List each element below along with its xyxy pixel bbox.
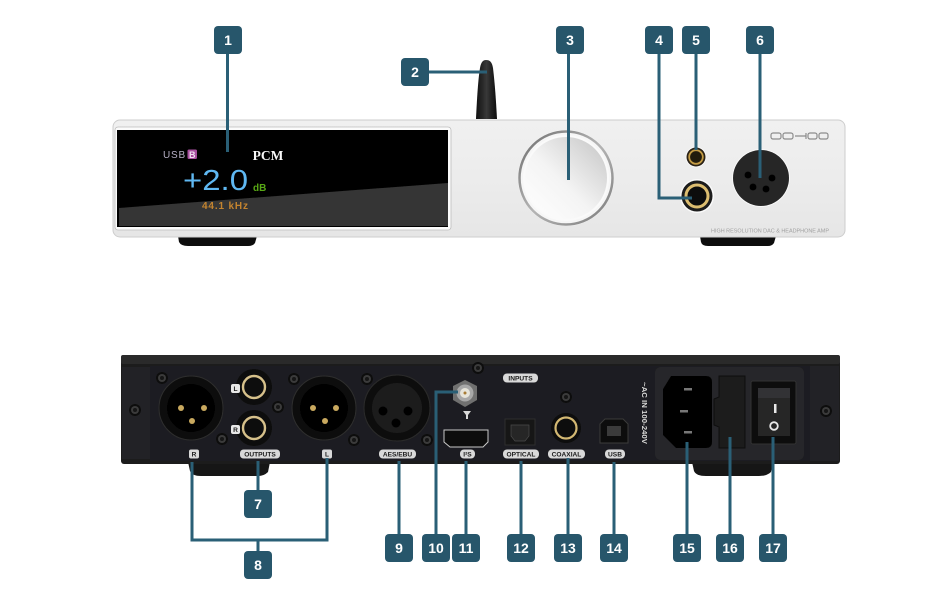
sample rate: 44.1 kHz bbox=[202, 201, 248, 212]
badge 9 bbox=[385, 534, 413, 562]
badge 9: 9 bbox=[395, 540, 403, 556]
badge 15 bbox=[673, 534, 701, 562]
badge 17: 17 bbox=[765, 540, 781, 556]
RCA outputs bbox=[236, 369, 272, 446]
badge 15: 15 bbox=[679, 540, 695, 556]
badge 8: 8 bbox=[254, 557, 262, 573]
rear labels: COAXIAL bbox=[552, 452, 581, 458]
antenna bbox=[476, 60, 497, 119]
badge 1: 1 bbox=[224, 32, 232, 48]
rear labels: USB bbox=[608, 452, 622, 458]
badge 13 bbox=[554, 534, 582, 562]
badge 17 bbox=[759, 534, 787, 562]
badge 6: 6 bbox=[756, 32, 764, 48]
badge 3: 3 bbox=[566, 32, 574, 48]
callout badges bbox=[214, 26, 787, 579]
rear panel device bbox=[121, 355, 840, 476]
rear labels: OPTICAL bbox=[507, 452, 535, 458]
badge 13: 13 bbox=[560, 540, 576, 556]
format label: PCM bbox=[253, 148, 284, 163]
badge 4: 4 bbox=[655, 32, 663, 48]
badge 12: 12 bbox=[513, 540, 529, 556]
badge 7: 7 bbox=[254, 496, 262, 512]
left balanced output bbox=[292, 376, 356, 440]
badge 16 bbox=[716, 534, 744, 562]
badge 5: 5 bbox=[692, 32, 700, 48]
AC input text: ~AC IN 100-240V bbox=[640, 382, 649, 444]
IEC power socket bbox=[663, 376, 712, 448]
badge 10 bbox=[422, 534, 450, 562]
volume knob bbox=[518, 130, 614, 226]
volume readout: +2.0 bbox=[183, 165, 248, 197]
badge 3 bbox=[556, 26, 584, 54]
badge 1 bbox=[214, 26, 242, 54]
rear labels: AES/EBU bbox=[383, 452, 412, 458]
badge 11 bbox=[452, 534, 480, 562]
rear labels: I²S bbox=[463, 452, 472, 458]
rear labels: INPUTS bbox=[508, 376, 533, 382]
rear labels: L bbox=[325, 452, 329, 458]
rear labels bbox=[189, 374, 625, 458]
badge 5 bbox=[682, 26, 710, 54]
input label bbox=[163, 150, 197, 161]
badge 4 bbox=[645, 26, 673, 54]
badge 10: 10 bbox=[428, 540, 444, 556]
badge 2: 2 bbox=[411, 64, 419, 80]
badge 16: 16 bbox=[722, 540, 738, 556]
product caption: HIGH RESOLUTION DAC & HEADPHONE AMP bbox=[711, 228, 830, 234]
small headphone jack bbox=[686, 146, 706, 168]
badge 14 bbox=[600, 534, 628, 562]
antenna connector bbox=[453, 380, 477, 407]
side brackets bbox=[122, 366, 839, 461]
balanced XLR headphone socket bbox=[732, 149, 790, 207]
input label: B bbox=[189, 150, 196, 160]
screen glare bbox=[119, 183, 448, 226]
right balanced output bbox=[159, 376, 223, 440]
rear labels: OUTPUTS bbox=[244, 452, 276, 458]
RCA channel tags: L bbox=[233, 386, 238, 393]
screws bbox=[129, 362, 832, 446]
AES/EBU socket bbox=[364, 375, 430, 441]
power rocker switch bbox=[751, 381, 796, 444]
silver chassis bbox=[113, 120, 845, 237]
coaxial socket bbox=[551, 413, 581, 443]
RCA channel tags bbox=[231, 384, 240, 434]
badge 7 bbox=[244, 490, 272, 518]
black chassis bbox=[121, 355, 840, 464]
callout leader lines bbox=[192, 54, 773, 551]
dB unit: dB bbox=[253, 183, 266, 194]
brand logo bbox=[771, 133, 828, 139]
badge 8 bbox=[244, 551, 272, 579]
optical socket bbox=[505, 419, 535, 445]
HDMI socket bbox=[444, 430, 488, 447]
rubber feet bbox=[178, 236, 776, 246]
badge 11: 11 bbox=[459, 540, 474, 556]
front panel device bbox=[113, 60, 845, 246]
large headphone jack bbox=[680, 179, 714, 213]
RCA channel tags: R bbox=[233, 427, 238, 434]
input label: USB bbox=[163, 150, 186, 161]
fuse holder bbox=[714, 376, 745, 448]
antenna symbol bbox=[463, 411, 471, 419]
display screen bbox=[115, 127, 451, 230]
power module plate bbox=[655, 367, 804, 460]
rear rubber feet bbox=[188, 462, 773, 476]
badge 12 bbox=[507, 534, 535, 562]
rear labels: R bbox=[192, 452, 197, 458]
badge 14: 14 bbox=[606, 540, 622, 556]
USB socket bbox=[600, 419, 628, 443]
badge 6 bbox=[746, 26, 774, 54]
badge 2 bbox=[401, 58, 429, 86]
